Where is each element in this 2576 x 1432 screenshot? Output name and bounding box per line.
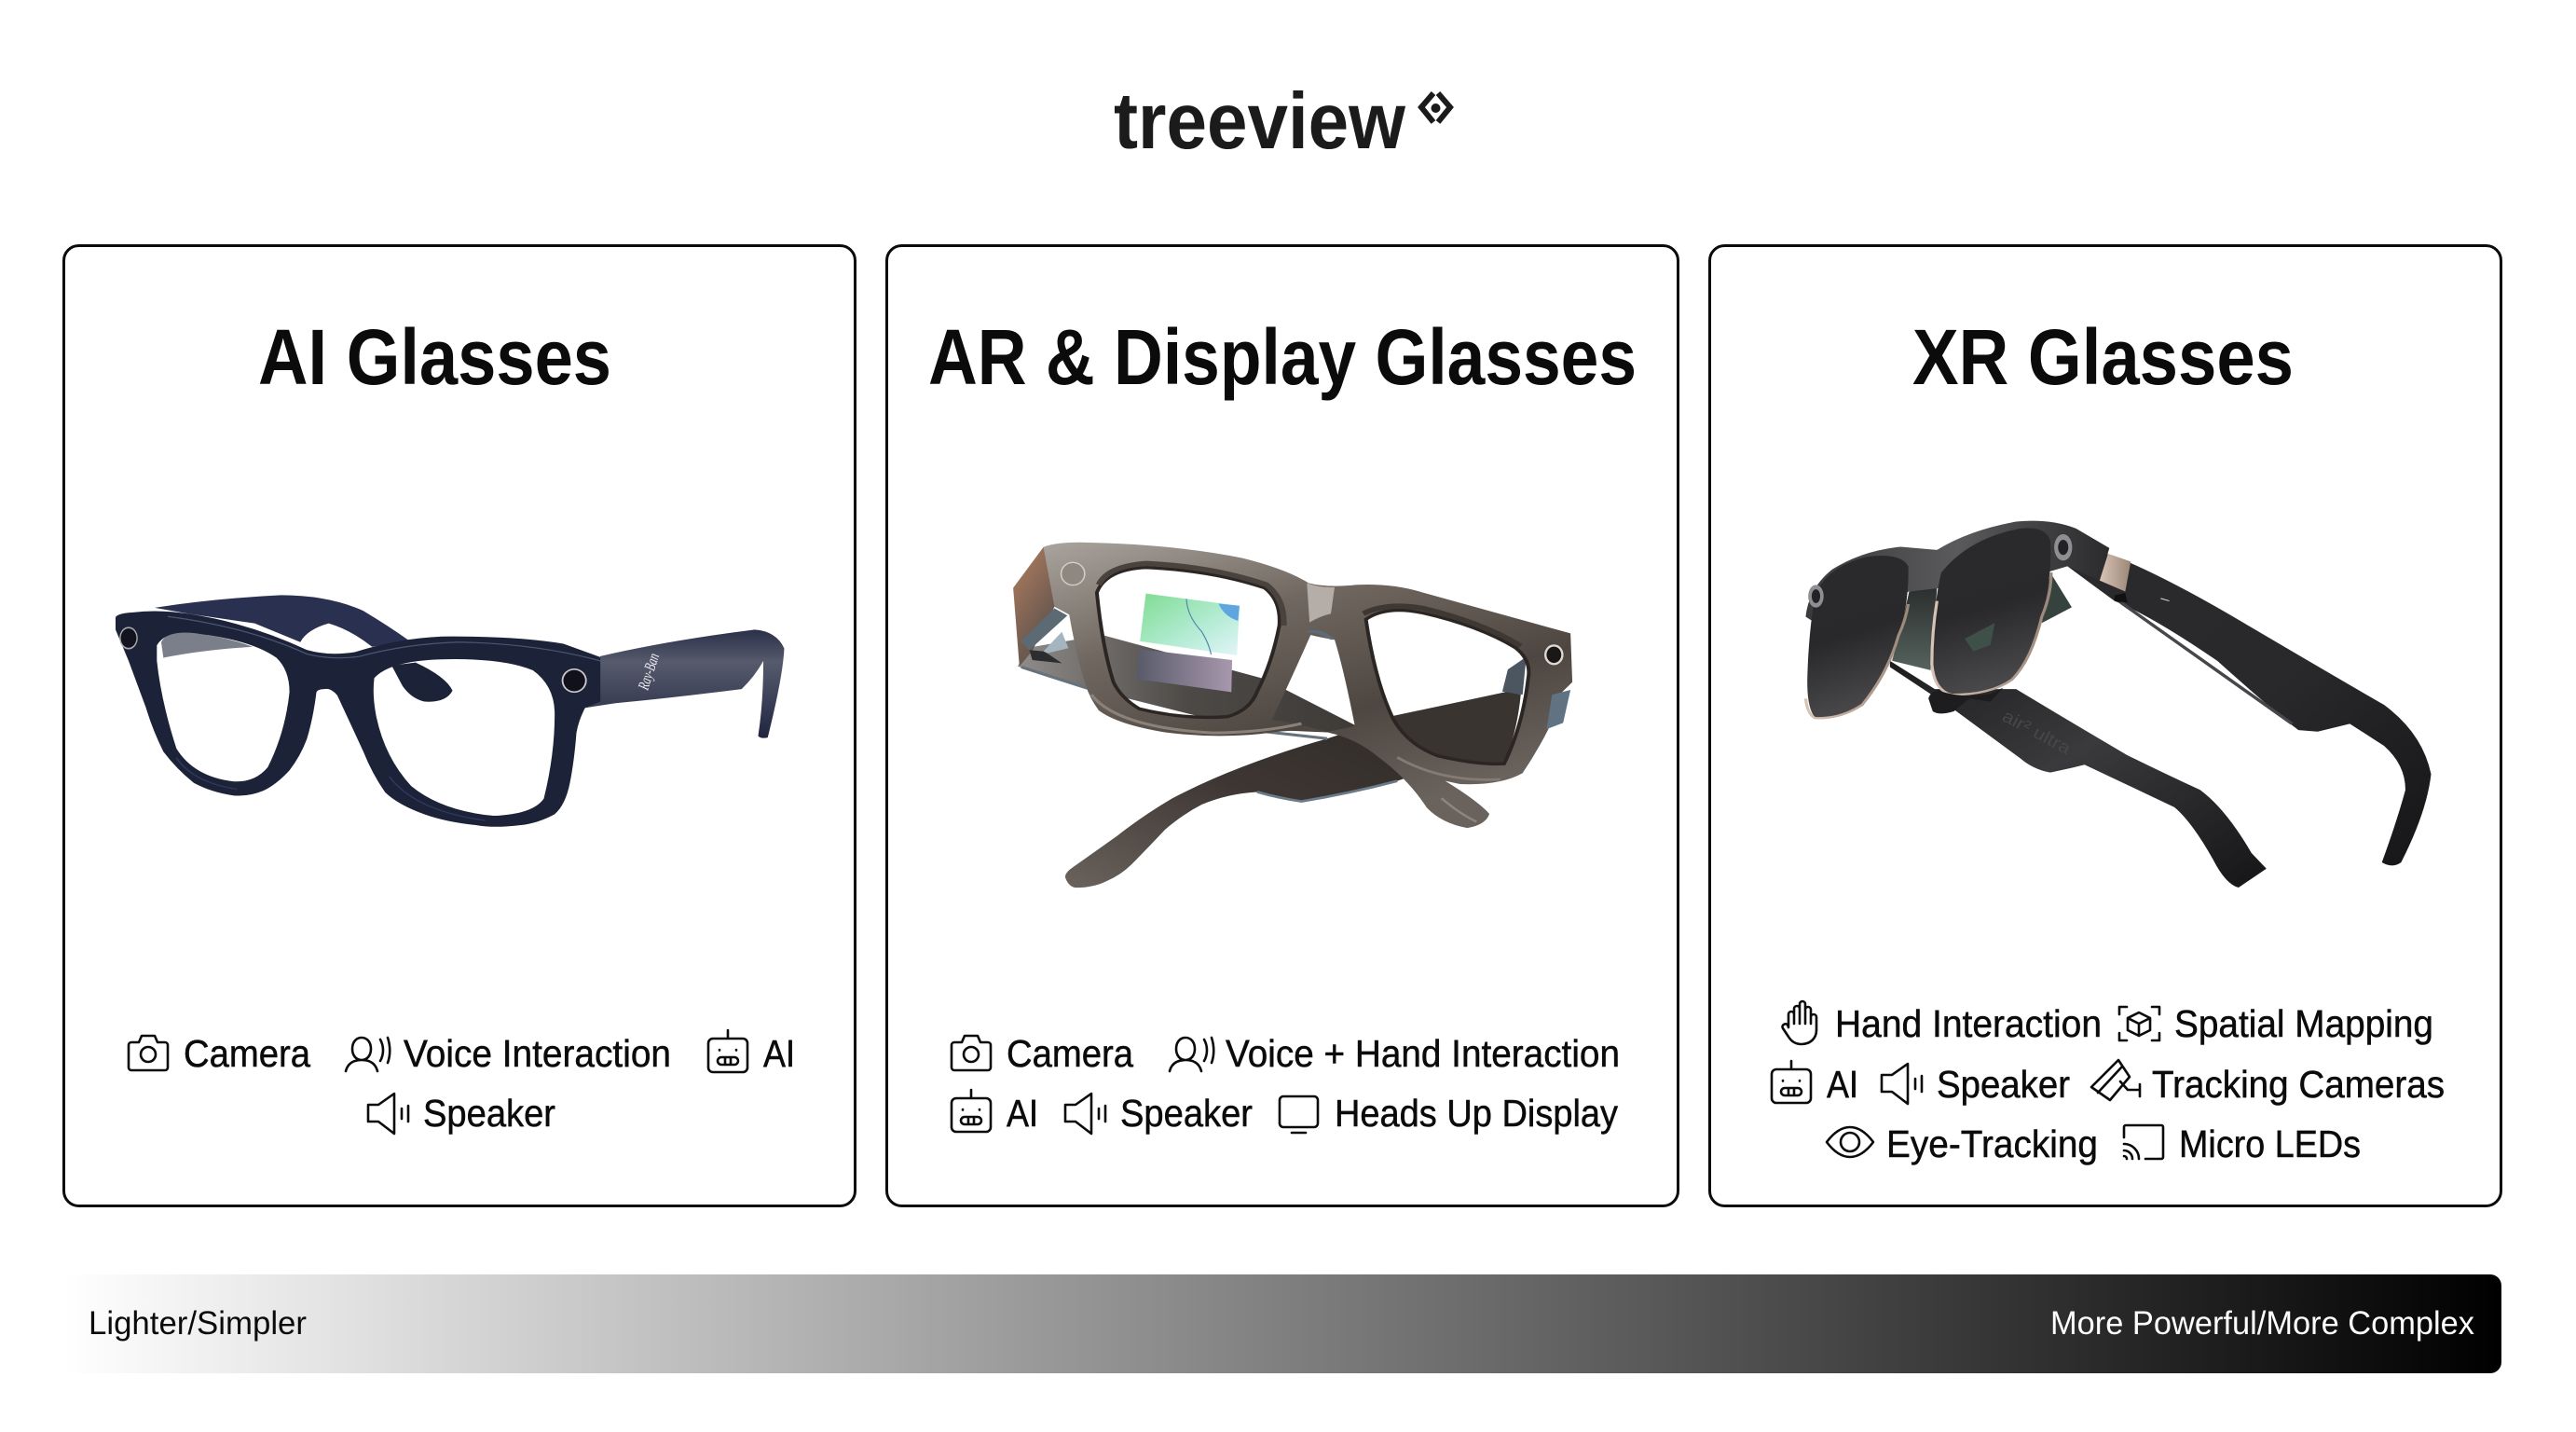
icon: speaker — [368, 1094, 408, 1134]
logo wordmark: treeview — [1114, 77, 1406, 166]
feature: Speaker: Speaker — [423, 1092, 555, 1135]
feature: Speaker — [1882, 1063, 2070, 1106]
feature: Tracking Cameras: Tracking Cameras — [2152, 1063, 2445, 1106]
icon: security camera — [2091, 1060, 2140, 1100]
label: lighter end: Lighter/Simpler — [89, 1305, 307, 1342]
feature: Camera: Camera — [184, 1032, 310, 1075]
feature: AI — [708, 1030, 795, 1075]
icon: spatial cube — [2119, 1007, 2159, 1040]
icon: voice — [346, 1038, 390, 1071]
icon: eye — [1827, 1127, 1873, 1157]
temple logo: Ray-Ban — [635, 651, 663, 693]
panel: AR & Display Glasses — [887, 246, 1678, 1206]
feature: Camera: Camera — [1007, 1032, 1133, 1075]
icon: robot — [952, 1090, 991, 1132]
feature: Voice + Hand Interaction: Voice + Hand Interaction — [1226, 1032, 1620, 1075]
panel frame — [887, 246, 1678, 1206]
feature: Speaker — [1065, 1092, 1253, 1135]
panel: XR Glasses — [1709, 246, 2501, 1206]
feature: AI: AI — [1827, 1063, 1858, 1106]
feature: AI — [952, 1090, 1038, 1135]
gradient scale bar — [62, 1274, 2501, 1373]
heading: XR Glasses: XR Glasses — [1912, 313, 2294, 401]
icon: speaker — [1065, 1094, 1105, 1134]
photo: navy Ray-Ban smart glasses — [116, 595, 784, 827]
label: powerful end: More Powerful/More Complex — [2050, 1305, 2474, 1342]
feature: Camera — [129, 1032, 310, 1075]
photo: black XR glasses — [1805, 521, 2431, 888]
icon: robot — [1772, 1061, 1811, 1103]
feature: Eye-Tracking: Eye-Tracking — [1886, 1122, 2098, 1165]
feature: AI: AI — [763, 1032, 795, 1075]
gradient bar — [62, 1274, 2501, 1373]
temple text: air² ultra — [1999, 707, 2075, 759]
panel frame — [1709, 246, 2501, 1206]
icon: cast display — [2124, 1125, 2163, 1159]
logo: treeview — [1114, 77, 1450, 166]
icon: speaker — [1882, 1064, 1922, 1104]
feature: Voice Interaction: Voice Interaction — [404, 1032, 671, 1075]
heading: AI Glasses: AI Glasses — [258, 313, 611, 401]
feature: Heads Up Display: Heads Up Display — [1335, 1092, 1618, 1135]
panel: AI Glasses — [63, 246, 856, 1206]
feature: Speaker: Speaker — [1937, 1063, 2070, 1106]
icon: voice — [1170, 1038, 1213, 1071]
feature: AI — [1772, 1061, 1858, 1106]
feature: Speaker — [368, 1092, 555, 1135]
feature: Micro LEDs: Micro LEDs — [2179, 1122, 2361, 1165]
logo diamond icon — [1421, 93, 1450, 122]
feature: Camera — [952, 1032, 1133, 1075]
icon: hand — [1782, 1001, 1816, 1044]
feature: Hand Interaction: Hand Interaction — [1835, 1002, 2102, 1045]
feature: Speaker: Speaker — [1120, 1092, 1253, 1135]
feature: Spatial Mapping: Spatial Mapping — [2174, 1002, 2433, 1045]
photo: grey AR display glasses — [1013, 543, 1572, 888]
icon: monitor — [1280, 1096, 1318, 1133]
icon: camera — [129, 1036, 168, 1070]
icon: robot — [708, 1030, 747, 1072]
heading: AR & Display Glasses: AR & Display Glasses — [928, 313, 1637, 401]
feature: AI: AI — [1007, 1092, 1038, 1135]
icon: camera — [952, 1036, 991, 1070]
panel frame — [63, 246, 856, 1206]
